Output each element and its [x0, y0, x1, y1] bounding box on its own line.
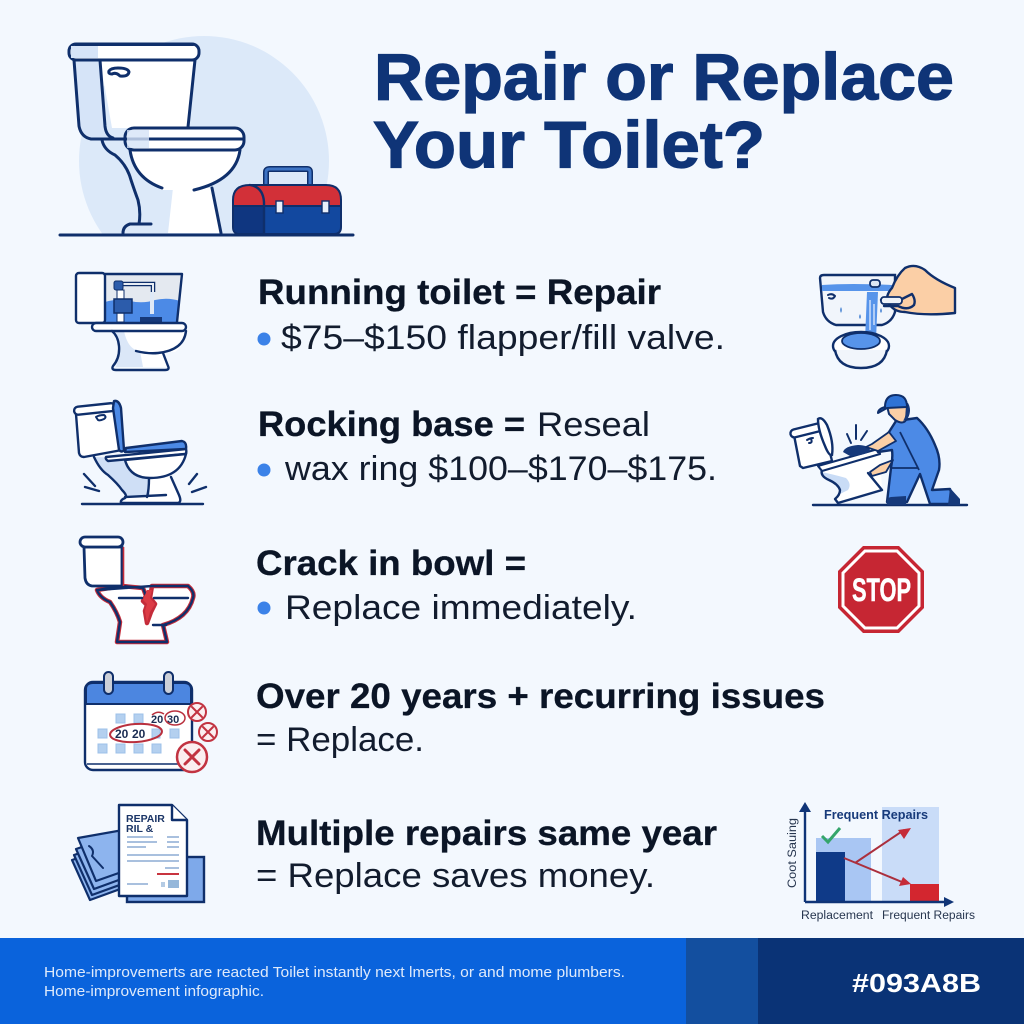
footer band	[0, 938, 1024, 1024]
icon: cracked toilet	[80, 537, 193, 642]
chart: replacement vs frequent repairs: Frequent Repairs	[882, 910, 975, 922]
title	[373, 40, 954, 182]
footer note	[44, 964, 625, 1000]
heading: Over 20 years + recurring issues	[256, 677, 825, 716]
row 1: running toilet	[76, 266, 955, 370]
bullet text: wax ring $100–$170–$175.	[284, 450, 717, 488]
body text: = Replace.	[256, 721, 424, 759]
heading: Multiple repairs same year	[256, 814, 717, 853]
icon: hero toilet with toolbox	[58, 36, 354, 236]
icon: repair bill and cash	[72, 805, 204, 902]
bullet text: $75–$150 flapper/fill valve.	[281, 319, 725, 357]
chart: replacement vs frequent repairs: Frequent Repairs	[824, 807, 928, 822]
icon: calendar with marks: 20	[132, 727, 146, 741]
icon: calendar with marks: 20	[151, 714, 163, 726]
row 4: over 20 years	[85, 672, 825, 772]
icon: repair bill and cash: RIL &	[126, 823, 154, 835]
chart: replacement vs frequent repairs	[787, 802, 975, 922]
footer note: Home-improvement infographic.	[44, 983, 264, 1000]
heading: Rocking base =	[258, 405, 525, 444]
row 5: multiple repairs	[72, 802, 975, 922]
icon: hand on flush lever	[820, 266, 955, 368]
icon: calendar with marks	[85, 672, 217, 772]
icon: rocking toilet	[74, 401, 206, 504]
heading: Running toilet = Repair	[258, 273, 661, 312]
footer note: Home-improvemerts are reacted Toilet instantly next lmerts, or and mome plumbers.	[44, 964, 625, 981]
heading outcome: Reseal	[537, 406, 650, 444]
icon: open tank toilet	[76, 273, 186, 370]
chart: replacement vs frequent repairs: Replacement	[801, 910, 874, 922]
title: Your Toilet?	[373, 108, 765, 182]
colour code: #093A8B	[852, 968, 981, 998]
row 2: rocking base	[74, 395, 967, 505]
toolbox	[233, 169, 341, 234]
icon: calendar with marks: 30	[167, 714, 179, 726]
chart: replacement vs frequent repairs: Coot Sauing	[787, 818, 799, 888]
bullet text: Replace immediately.	[285, 589, 637, 627]
icon: plumber fixing toilet	[790, 395, 967, 505]
body text: = Replace saves money.	[256, 857, 655, 895]
heading: Crack in bowl =	[256, 544, 526, 583]
title: Repair or Replace	[374, 40, 954, 114]
row 3: crack in bowl	[80, 537, 924, 642]
icon: stop sign: STOP	[852, 572, 911, 608]
icon: repair bill and cash: REPAIR	[126, 813, 165, 825]
icon: stop sign	[838, 546, 924, 633]
icon: calendar with marks: 20	[115, 727, 129, 741]
